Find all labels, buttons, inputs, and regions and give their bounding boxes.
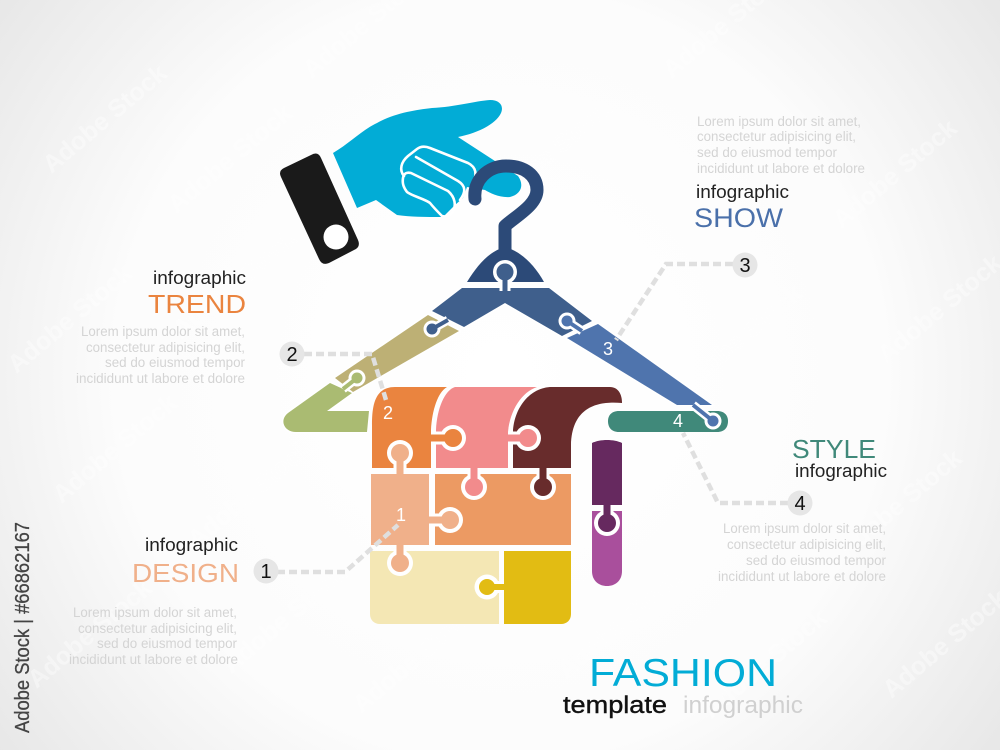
- text block: show: infographic: [696, 182, 789, 202]
- peach bottom knob: [387, 543, 413, 576]
- green left end: [283, 383, 369, 432]
- text block: design: DESIGN: [132, 558, 239, 588]
- text: Adobe Stock: [217, 559, 352, 679]
- text block: show: [694, 114, 865, 233]
- title: template: [563, 692, 667, 719]
- orange piece: [372, 387, 447, 468]
- yellow knob: [474, 574, 506, 600]
- badge 3: [732, 252, 758, 278]
- text: Adobe Stock: [672, 279, 807, 399]
- text block: show: consectetur adipisicing elit,: [697, 129, 856, 144]
- step numbers on shapes: 3: [603, 339, 613, 359]
- mid orange piece: [435, 474, 571, 545]
- badge 2: [280, 342, 304, 366]
- badge 3: 3: [739, 255, 751, 277]
- tan arm piece: [335, 315, 459, 392]
- text block: style: incididunt ut labore et dolore: [718, 569, 886, 584]
- hanger: [283, 166, 728, 432]
- top knob: [493, 260, 517, 291]
- maroon knob: [530, 466, 556, 500]
- cream piece: [370, 551, 499, 624]
- light blue arm piece: [567, 324, 712, 405]
- text: Adobe Stock: [832, 444, 967, 564]
- center piece left knob: [424, 320, 448, 338]
- yellow piece: [504, 551, 571, 624]
- vertical stock credit: Adobe Stock | #66862167: [12, 522, 34, 733]
- text: Adobe Stock: [22, 574, 157, 694]
- text: Adobe Stock: [162, 99, 297, 219]
- pink right knob: [506, 425, 541, 451]
- teal shoulder bar: [608, 411, 728, 432]
- orange knob: [429, 425, 466, 451]
- text block: trend: incididunt ut labore et dolore: [76, 371, 245, 386]
- text block: show: Lorem ipsum dolor sit amet,: [697, 114, 861, 129]
- text: Adobe Stock: [37, 59, 172, 179]
- icon: hand holding hanger: [280, 100, 521, 264]
- hanger top piece: [467, 247, 544, 282]
- text block: design: [69, 535, 239, 667]
- text block: trend: sed do eiusmod tempor: [105, 355, 246, 370]
- text block: design: sed do eiusmod tempor: [97, 636, 238, 651]
- badge 1: 1: [260, 561, 272, 583]
- text block: trend: infographic: [153, 268, 246, 288]
- text block: trend: Lorem ipsum dolor sit amet,: [81, 324, 245, 339]
- step numbers on shapes: 4: [673, 411, 683, 431]
- pink piece: [436, 387, 537, 468]
- right arm end knob: [693, 405, 722, 430]
- pink bottom knob: [461, 466, 487, 500]
- text block: design: consectetur adipisicing elit,: [78, 621, 237, 636]
- green knob: [343, 370, 366, 389]
- text: Adobe Stock: [697, 604, 832, 724]
- sleeve knob: [594, 503, 620, 536]
- peach top knob: [387, 440, 413, 476]
- shirt puzzle: [370, 387, 622, 624]
- text: Adobe Stock: [827, 114, 962, 234]
- text block: trend: [76, 268, 246, 386]
- text block: show: sed do eiusmod tempor: [697, 145, 838, 160]
- text: Adobe Stock: [167, 224, 302, 344]
- peach piece: [371, 474, 429, 545]
- title: FASHION: [589, 652, 777, 695]
- maroon piece: [513, 387, 622, 468]
- step numbers on shapes: [383, 339, 683, 525]
- text: Adobe Stock: [2, 259, 137, 379]
- right arm upper knob: [558, 312, 582, 331]
- text: Adobe Stock: [47, 389, 182, 509]
- peach right knob: [427, 507, 463, 533]
- text block: style: STYLE: [792, 434, 876, 464]
- text block: style: Lorem ipsum dolor sit amet,: [723, 521, 886, 536]
- title: infographic: [683, 692, 803, 719]
- sleeve upper: [592, 440, 622, 505]
- text block: design: Lorem ipsum dolor sit amet,: [73, 605, 237, 620]
- text block: style: consectetur adipisicing elit,: [727, 537, 886, 552]
- hook: [475, 166, 537, 255]
- text block: show: incididunt ut labore et dolore: [697, 161, 865, 176]
- text block: design: incididunt ut labore et dolore: [69, 652, 238, 667]
- text: Adobe Stock: [552, 564, 687, 684]
- text block: trend: TREND: [148, 289, 246, 319]
- badge 4: 4: [794, 493, 806, 515]
- text: Adobe Stock: [182, 434, 317, 554]
- step numbers on shapes: 1: [396, 505, 406, 525]
- badge 1: [254, 558, 278, 584]
- text block: show: SHOW: [694, 203, 784, 233]
- text block: style: sed do eiusmod tempor: [746, 553, 887, 568]
- leader lines: [277, 264, 788, 572]
- shirt cuff: [280, 154, 359, 264]
- hand: [333, 100, 521, 217]
- text block: design: infographic: [145, 535, 238, 555]
- center blue piece: [432, 288, 592, 336]
- text block: style: infographic: [795, 461, 887, 481]
- badge 4: [788, 490, 812, 516]
- text block: trend: consectetur adipisicing elit,: [86, 340, 245, 355]
- text: Adobe Stock: [482, 94, 617, 214]
- text block: style: [718, 434, 887, 584]
- step numbers on shapes: 2: [383, 403, 393, 423]
- title: [563, 652, 803, 719]
- sleeve lower: [592, 511, 622, 586]
- badge 2: 2: [286, 344, 298, 366]
- fingers: [401, 147, 475, 216]
- text: Adobe Stock: [347, 599, 482, 719]
